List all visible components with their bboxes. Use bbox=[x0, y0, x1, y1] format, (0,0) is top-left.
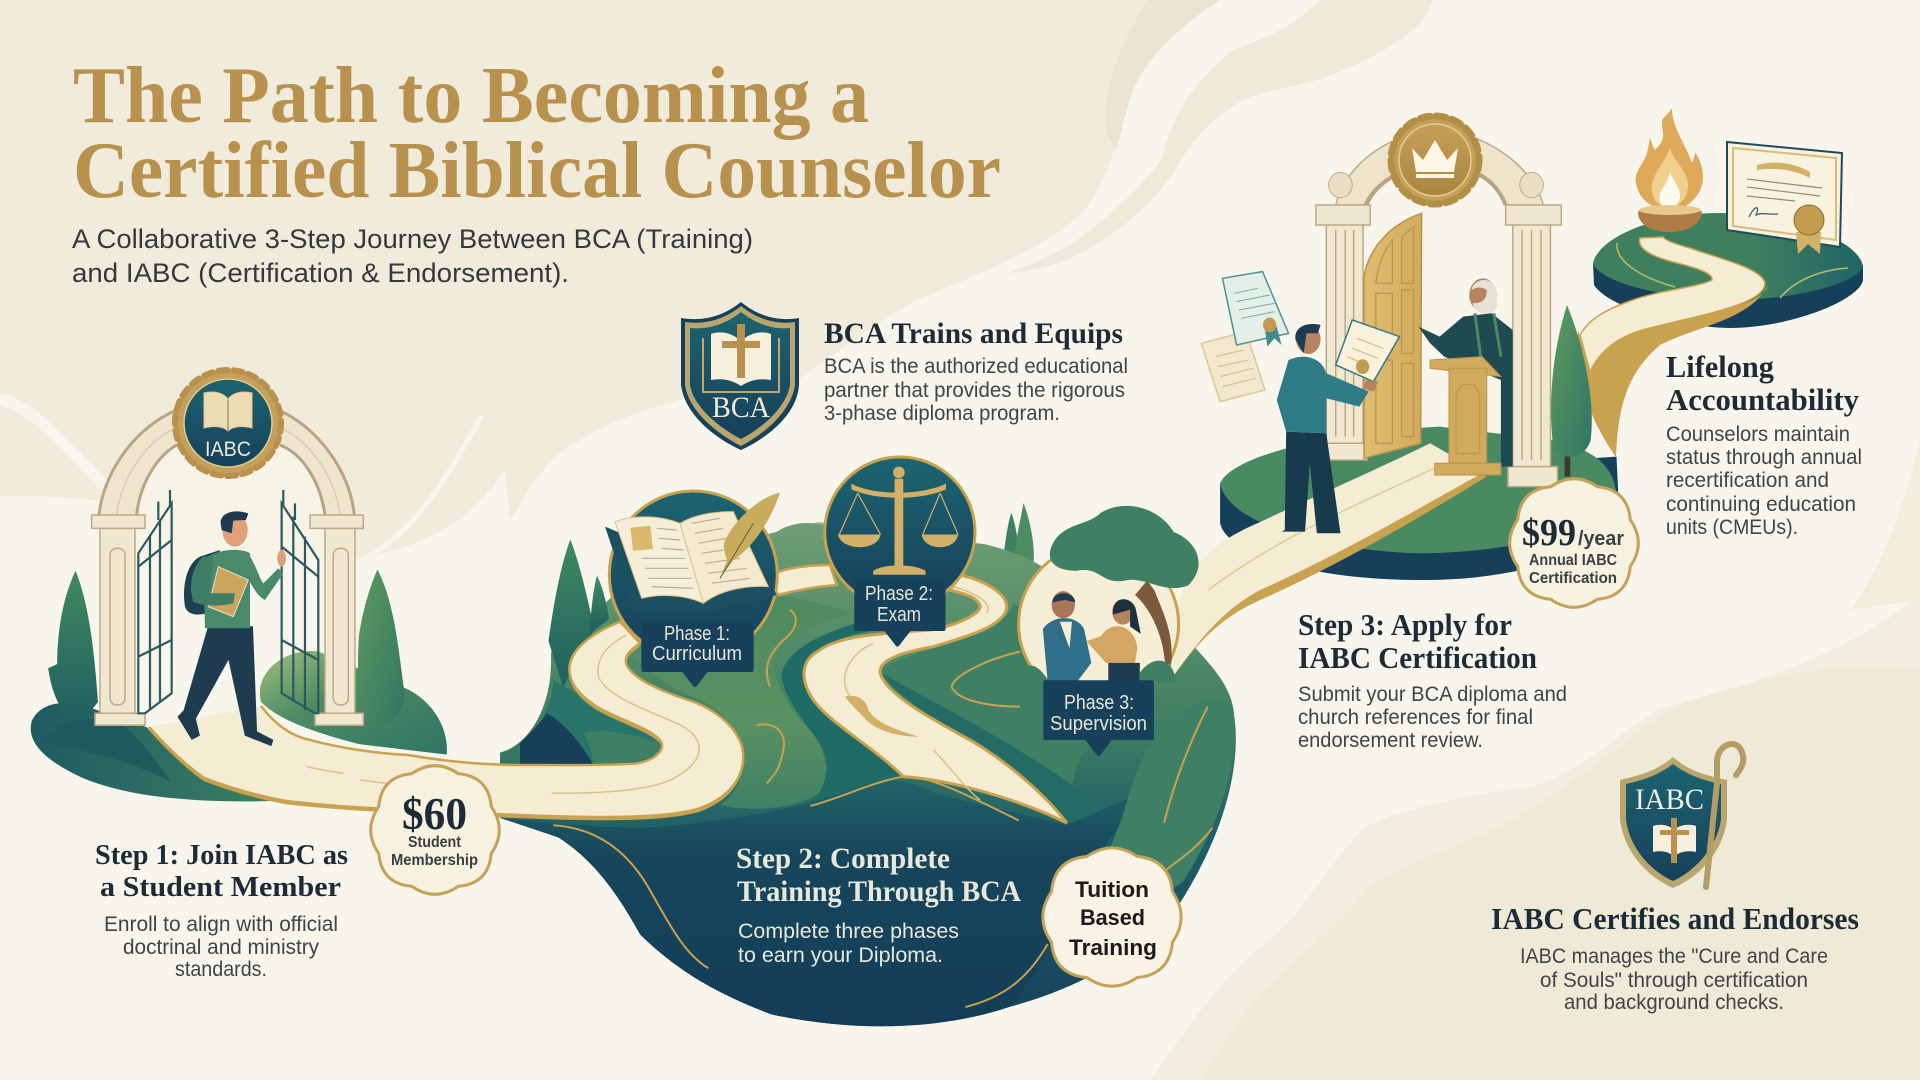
title bbox=[73, 52, 1001, 215]
pillar bases bbox=[95, 713, 363, 725]
BCA shield: BCA bbox=[712, 391, 770, 424]
loop navy bbox=[520, 713, 593, 765]
label: phase 3: Supervision bbox=[1050, 713, 1147, 735]
gold contour lines bbox=[553, 707, 1213, 1007]
left tree bbox=[48, 571, 98, 723]
text block: step 3: Submit your BCA diploma and bbox=[1298, 683, 1567, 706]
text block: step 1: Step 1: Join IABC as bbox=[95, 839, 348, 871]
phase 3 supervision vignette bbox=[1019, 506, 1199, 754]
text block: step 2: Training Through BCA bbox=[737, 875, 1021, 908]
arch opening bbox=[137, 445, 325, 560]
label: phase 1 bbox=[652, 623, 742, 665]
text block: lifelong accountability: Counselors maintain bbox=[1666, 423, 1850, 446]
counselor and counselee bbox=[1023, 591, 1176, 685]
$60 badge: Membership bbox=[391, 852, 478, 869]
text block: lifelong accountability: Accountability bbox=[1666, 382, 1859, 417]
road B surface bbox=[804, 575, 1067, 823]
text block: step 3: endorsement review. bbox=[1298, 729, 1483, 752]
$60 badge: Student bbox=[408, 834, 462, 851]
IABC shield with shepherd crook bbox=[1620, 744, 1743, 888]
applicant bbox=[1277, 320, 1399, 533]
tuition badge: Tuition bbox=[1075, 877, 1149, 902]
island base bbox=[1220, 457, 1619, 580]
text block: step 1: a Student Member bbox=[100, 871, 341, 903]
IABC seal on gate bbox=[175, 370, 281, 476]
island gold lines bbox=[1617, 243, 1848, 298]
scene: certification doorway bbox=[1201, 130, 1592, 533]
text block: IABC certifies and endorses: and background checks. bbox=[1564, 991, 1784, 1014]
tuition badge bbox=[1043, 848, 1181, 986]
finials bbox=[1329, 172, 1543, 198]
phase 2 label bbox=[856, 581, 944, 644]
road A lane lines bbox=[307, 635, 699, 793]
subtitle: and IABC (Certification & Endorsement). bbox=[72, 258, 569, 288]
island green side bbox=[260, 651, 447, 755]
label: phase 2: Exam bbox=[877, 604, 921, 626]
bush bbox=[45, 718, 171, 782]
text block: IABC certifies and endorses: IABC Certifies and Endorses bbox=[1491, 901, 1859, 936]
phase 2 circle bbox=[825, 457, 975, 607]
road gold underside bbox=[149, 625, 743, 820]
text block: BCA trains and equips bbox=[824, 317, 1128, 425]
text block: step 3: church references for final bbox=[1298, 706, 1533, 729]
phase 1 open book bbox=[605, 493, 780, 614]
title: The Path to Becoming a bbox=[73, 52, 869, 140]
island top bbox=[1593, 213, 1863, 300]
phase 3 circle bbox=[1019, 544, 1179, 704]
scene: lower navy hill bbox=[500, 701, 1234, 1026]
title: Certified Biblical Counselor bbox=[73, 127, 1001, 215]
door bbox=[1364, 213, 1422, 458]
text block: step 1: Enroll to align with official bbox=[104, 913, 338, 936]
text block: lifelong accountability: Lifelong bbox=[1666, 349, 1774, 384]
text block: step 3: IABC Certification bbox=[1298, 640, 1537, 675]
left gate bbox=[138, 490, 172, 713]
legs bbox=[177, 626, 273, 746]
road: from gate through winding path bbox=[149, 565, 1067, 823]
text block: BCA trains and equips: partner that provides the rigorous bbox=[824, 379, 1125, 402]
text block: step 3: Step 3: Apply for bbox=[1298, 607, 1512, 642]
text block: lifelong accountability: status through annual bbox=[1666, 446, 1862, 469]
text block: IABC certifies and endorses: IABC manages the "Cure and Care bbox=[1520, 945, 1828, 968]
student bbox=[177, 511, 286, 746]
$99 badge: Certification bbox=[1529, 570, 1617, 587]
IABC seal on gate: IABC bbox=[205, 438, 251, 461]
arch bbox=[1336, 130, 1543, 205]
text block: BCA trains and equips: BCA Trains and Equips bbox=[824, 317, 1123, 350]
BCA shield bbox=[681, 302, 799, 450]
label: phase 3 bbox=[1050, 692, 1147, 735]
island dark side bbox=[31, 703, 277, 801]
right tree bbox=[358, 569, 404, 728]
island base bbox=[1593, 263, 1863, 328]
tree bbox=[1050, 506, 1199, 665]
lower right bush bbox=[1106, 701, 1234, 890]
text block: IABC certifies and endorses: of Souls" through certification bbox=[1540, 969, 1808, 992]
road surface bbox=[1580, 237, 1765, 372]
road B crack bbox=[845, 696, 918, 737]
label: phase 1: Phase 1: bbox=[664, 623, 730, 645]
text block: BCA trains and equips: 3-phase diploma program. bbox=[824, 402, 1060, 425]
scene: step 1 island bbox=[31, 569, 447, 801]
text block: step 2: to earn your Diploma. bbox=[738, 944, 943, 967]
road upper segment bbox=[767, 565, 837, 595]
text block: step 1: doctrinal and ministry bbox=[123, 936, 319, 959]
right gate bbox=[282, 490, 318, 713]
road A surface bbox=[149, 622, 743, 817]
arch inner moulding bbox=[117, 427, 340, 515]
$60 badge: $60 bbox=[402, 789, 467, 839]
navy base bbox=[500, 781, 1140, 1026]
scene: hill mass of step 2 bbox=[500, 503, 1236, 1026]
arch tan rim bbox=[99, 410, 354, 515]
phase 1 badge bbox=[605, 491, 780, 685]
label: phase 1: Curriculum bbox=[652, 643, 742, 665]
text block: step 1: standards. bbox=[175, 958, 267, 981]
podium bbox=[1430, 357, 1501, 475]
phase 1 label bbox=[643, 623, 752, 685]
island top bbox=[1220, 427, 1617, 553]
tuition badge: Training bbox=[1069, 935, 1157, 960]
hill mass bbox=[500, 523, 1236, 1026]
documents bbox=[1201, 272, 1289, 402]
text block: step 1 bbox=[95, 839, 348, 981]
middle green bbox=[633, 597, 853, 809]
certificate bbox=[1727, 142, 1842, 254]
text block: step 3 bbox=[1298, 607, 1567, 752]
text block: lifelong accountability: units (CMEUs). bbox=[1666, 516, 1798, 539]
crown seal bbox=[1391, 116, 1479, 204]
left pillar bbox=[92, 515, 145, 715]
scene: valley colour bands bbox=[520, 597, 1107, 823]
text block: step 2 bbox=[736, 842, 1021, 967]
flame bbox=[1636, 108, 1703, 232]
subtitle bbox=[72, 224, 753, 288]
upper island with flame and certificate bbox=[1578, 108, 1863, 457]
phase 2 scales bbox=[838, 467, 958, 575]
upper body bbox=[184, 511, 286, 628]
right green bbox=[883, 603, 1103, 823]
phase 2 badge bbox=[825, 457, 975, 644]
right column bbox=[1506, 205, 1561, 487]
$60 badge bbox=[371, 766, 499, 894]
label: phase 2: Phase 2: bbox=[865, 583, 933, 605]
contour lines and grass bbox=[757, 610, 1020, 783]
text block: lifelong accountability: recertification and bbox=[1666, 469, 1829, 492]
$99 badge bbox=[1510, 479, 1638, 607]
text block: BCA trains and equips: BCA is the authorized educational bbox=[824, 355, 1128, 378]
arch inner tan band bbox=[1364, 165, 1506, 210]
label: phase 3: Phase 3: bbox=[1064, 692, 1134, 714]
$99 badge: Annual IABC bbox=[1529, 552, 1617, 569]
loop green bbox=[583, 731, 660, 764]
loop teal bbox=[520, 680, 662, 765]
arch bbox=[98, 410, 355, 515]
label: phase 2 bbox=[865, 583, 933, 626]
phase 3 label bbox=[1045, 682, 1152, 754]
cypress trees bbox=[548, 539, 609, 687]
$99 badge: /year bbox=[1578, 528, 1624, 550]
road B lane lines bbox=[845, 587, 988, 800]
tuition badge: Based bbox=[1080, 905, 1145, 930]
text block: lifelong accountability bbox=[1666, 349, 1862, 539]
scene: gate of step 1 bbox=[92, 410, 363, 725]
teal band bbox=[782, 623, 900, 805]
IABC shield with shepherd crook: IABC bbox=[1635, 783, 1704, 816]
pastor bbox=[1418, 278, 1513, 467]
text block: lifelong accountability: continuing education bbox=[1666, 493, 1856, 516]
subtitle: A Collaborative 3-Step Journey Between BCA (Training) bbox=[72, 224, 753, 254]
$99 badge: $99 bbox=[1522, 512, 1576, 554]
text block: step 2: Complete three phases bbox=[738, 920, 959, 943]
back hills bbox=[747, 503, 1034, 571]
text block: IABC certifies and endorses bbox=[1491, 901, 1859, 1014]
text block: step 2: Step 2: Complete bbox=[736, 842, 950, 875]
road gold underside bbox=[1169, 473, 1487, 682]
phase 1 circle bbox=[609, 491, 777, 659]
cypress tree bbox=[1551, 305, 1592, 477]
right teal bbox=[882, 673, 1107, 823]
left column bbox=[1316, 205, 1370, 460]
scene: step 3 island and road bbox=[1169, 427, 1619, 682]
road gold swoosh bbox=[1578, 285, 1768, 457]
road surface bbox=[1169, 443, 1482, 682]
right pillar bbox=[310, 515, 363, 715]
